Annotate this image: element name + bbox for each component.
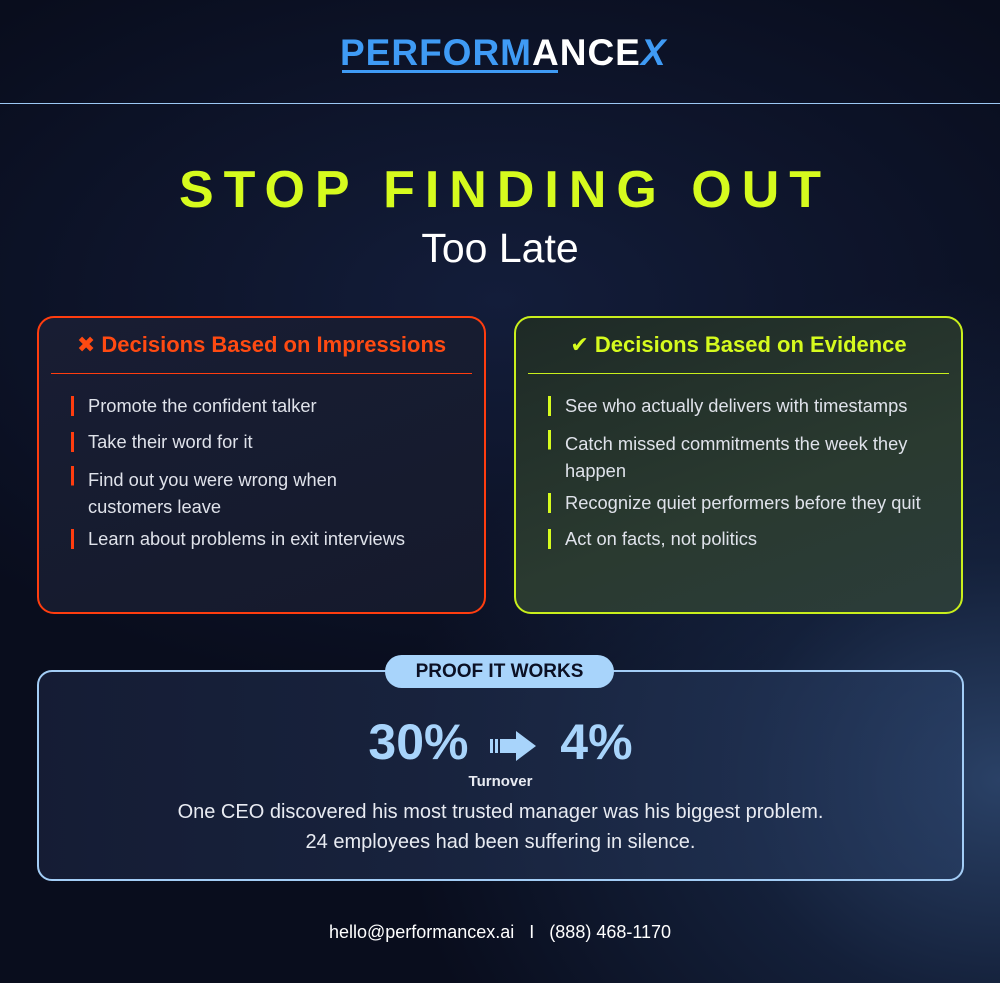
logo: PERFORMANCEX [340,32,667,73]
description: 24 employees had been suffering in silence. [306,831,695,853]
list: evidence: Catch missed commitments the week they [565,433,907,454]
heading: impressions: ✖ Decisions Based on Impressions [77,332,446,357]
description: One CEO discovered his most trusted manager was his biggest problem. [178,801,823,823]
footer contact: hello@performancex.ai I (888) 468-1170 [329,922,671,942]
panel: impressions [37,316,486,614]
subtitle: Too Late [421,225,579,271]
list: impressions: Find out you were wrong when [88,469,337,490]
list: impressions: Take their word for it [88,431,253,452]
stat label: Turnover [469,773,532,790]
list: evidence: Act on facts, not politics [565,528,757,549]
badge: proof it works: PROOF IT WORKS [416,661,583,682]
list: evidence: happen [565,460,626,481]
header divider [0,103,1000,104]
list: evidence: See who actually delivers with timestamps [565,395,907,416]
heading: evidence: ✔ Decisions Based on Evidence [570,332,907,357]
panel: proof [37,670,964,881]
list: evidence: Recognize quiet performers before they quit [565,492,921,513]
list: impressions: Promote the confident talker [88,395,317,416]
badge: proof it works [385,655,614,688]
list: impressions: Learn about problems in exit interviews [88,528,405,549]
title: STOP FINDING OUT [179,161,831,219]
list: evidence [548,395,921,549]
stat: 30% 4% [368,714,633,770]
panel: evidence [514,316,963,614]
list: impressions [71,395,405,549]
description [178,801,823,853]
list: impressions: customers leave [88,496,221,517]
